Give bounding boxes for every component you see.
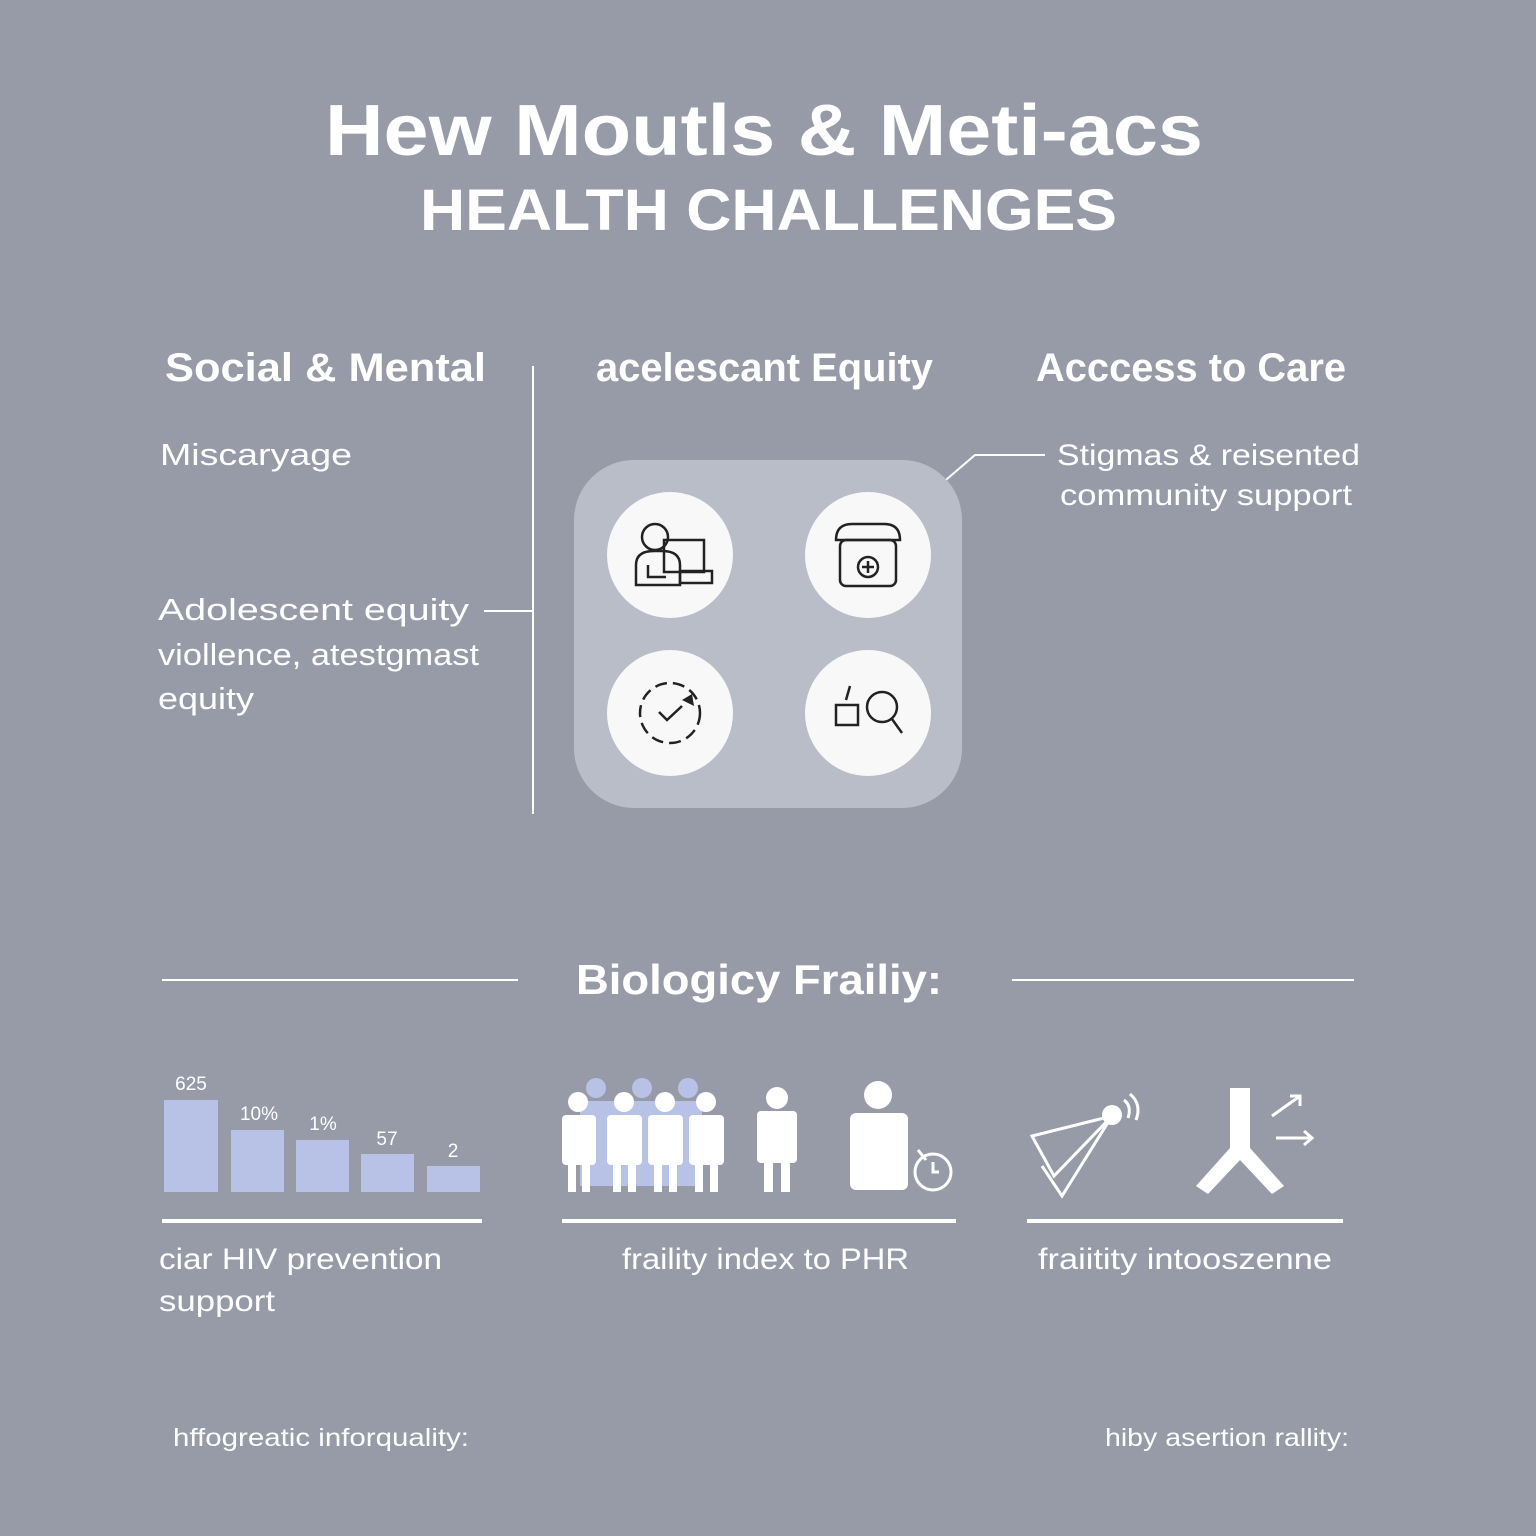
text block: adolescent equity: equity <box>158 681 255 716</box>
icon group: signal and branch: fraiitity intooszenne <box>1038 1243 1332 1276</box>
heading: access to care: Acccess to Care <box>1036 346 1346 390</box>
heading: biology frailty: Biologicy Frailiy: <box>576 956 942 1003</box>
icon group: people <box>562 1078 956 1276</box>
icon: magnifier <box>805 650 931 776</box>
icon group: signal and branch <box>1027 1088 1343 1276</box>
icon group: people: fraility index to PHR <box>622 1243 909 1276</box>
icon: person at computer <box>607 492 733 618</box>
connector line <box>484 610 532 612</box>
panel: icon grid <box>574 460 962 808</box>
icon: medical kit <box>805 492 931 618</box>
callout: stigmas: community support <box>1060 479 1353 512</box>
bar chart: 1% <box>309 1114 337 1135</box>
bar chart: support <box>159 1285 276 1318</box>
title: HEALTH CHALLENGES <box>420 178 1117 243</box>
bar chart: 10% <box>240 1104 278 1125</box>
bar chart: ciar HIV prevention <box>159 1243 442 1276</box>
title <box>325 91 1203 243</box>
footer left: hffogreatic inforquality: <box>173 1424 469 1452</box>
vertical divider <box>532 366 534 814</box>
callout: stigmas: Stigmas & reisented <box>1057 439 1360 472</box>
bar chart: 625 <box>175 1074 207 1095</box>
text: miscaryage: Miscaryage <box>160 437 352 472</box>
icon: clock check <box>607 650 733 776</box>
heading: social & mental: Social & Mental <box>165 346 486 390</box>
bar chart: 2 <box>448 1141 458 1162</box>
bar chart: 57 <box>376 1129 398 1150</box>
heading: adolescent equity: acelescant Equity <box>596 346 934 390</box>
footer right: hiby asertion rallity: <box>1105 1424 1349 1452</box>
text block: adolescent equity: viollence, atestgmast <box>158 637 479 672</box>
text block: adolescent equity <box>158 592 479 716</box>
callout: stigmas <box>940 439 1360 512</box>
text block: adolescent equity: Adolescent equity <box>158 592 470 627</box>
title: Hew Moutls & Meti-acs <box>325 91 1203 171</box>
bar chart <box>159 1074 482 1318</box>
